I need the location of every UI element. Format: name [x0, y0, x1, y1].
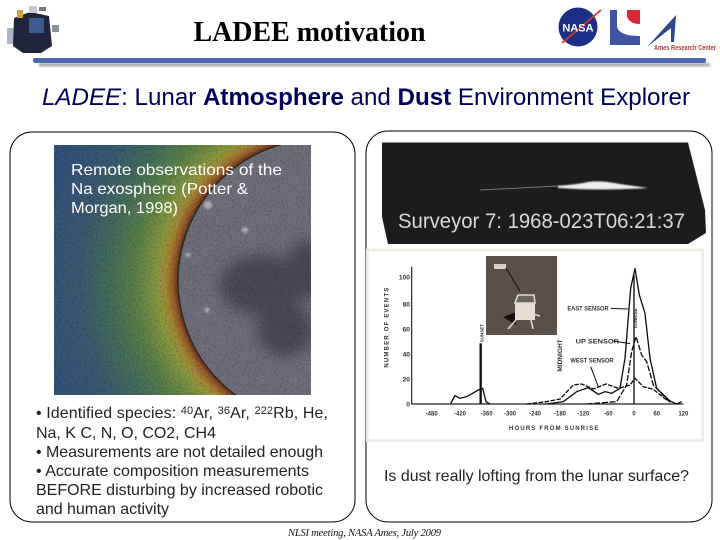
bullet text: Ar,: [193, 405, 218, 422]
sensor chart: 40: [403, 352, 410, 359]
footer: NLSI meeting, NASA Ames, July 2009: [287, 528, 442, 539]
bullet text: and human activity: [36, 501, 169, 518]
sensor chart: 100: [399, 275, 410, 282]
sensor chart: SUNSET: [479, 324, 484, 342]
sensor chart: 60: [403, 327, 410, 334]
sensor chart: HOURS FROM SUNRISE: [509, 426, 598, 432]
icon: NASA logo: [558, 8, 601, 46]
sensor chart: -420: [454, 411, 467, 417]
panel outline right: [366, 131, 712, 522]
sensor chart: NUMBER OF EVENTS: [384, 288, 390, 368]
panel: exosphere: [10, 132, 356, 522]
sensor chart: MIDNIGHT: [557, 339, 564, 372]
sensor chart: SUNRISE: [633, 308, 638, 328]
dust question: Is dust really lofting from the lunar surface?: [384, 468, 689, 485]
sensor chart: -180: [554, 411, 567, 417]
header rule: [33, 58, 710, 66]
bullet text: Rb, He,: [273, 405, 328, 422]
bullet text: • Measurements are not detailed enough: [36, 444, 323, 461]
sensor chart: 0: [406, 402, 410, 409]
sensor chart: EAST SENSOR: [567, 306, 609, 312]
panel outline left: [10, 132, 355, 522]
bullet text: BEFORE disturbing by increased robotic: [36, 482, 323, 499]
title: LADEE motivation: [194, 17, 426, 48]
bullet text: • Accurate composition measurements: [36, 463, 309, 480]
bullet text: [36, 405, 328, 518]
sensor chart: WEST SENSOR: [570, 359, 614, 365]
Surveyor 7 image: [382, 142, 706, 244]
Surveyor 7 image: Surveyor 7: 1968-023T06:21:37: [398, 210, 685, 233]
bullet text: 40: [181, 405, 193, 417]
icon: NASA logo: NASA: [562, 22, 594, 34]
sensor chart: UP SENSOR: [576, 339, 620, 345]
sensor chart: -300: [504, 411, 517, 417]
inset photo: lunar instrument: [486, 256, 557, 335]
icon: Ames Research Center logo: [647, 15, 716, 52]
sensor chart: -360: [481, 411, 493, 417]
image caption: Morgan, 1998): [71, 200, 178, 217]
sensor chart: 60: [653, 411, 661, 417]
sensor chart: -240: [529, 411, 542, 417]
image caption: Na exosphere (Potter &: [71, 181, 248, 198]
icon: LADEE spacecraft: [7, 6, 59, 53]
exosphere image: [54, 145, 311, 395]
sensor chart: -480: [426, 411, 438, 417]
bullet text: 222: [254, 405, 273, 417]
sensor chart: -60: [604, 411, 613, 417]
bullet text: Na, K C, N, O, CO2, CH4: [36, 425, 216, 442]
sensor chart: 120: [678, 411, 689, 417]
sensor chart: 20: [403, 377, 410, 384]
sensor chart: -120: [577, 411, 590, 417]
sensor chart: 0: [632, 411, 636, 417]
sensor chart: 80: [403, 302, 410, 309]
image caption: [71, 162, 282, 217]
panel: lunar dust: [366, 131, 712, 522]
image caption: Remote observations of the: [71, 162, 282, 179]
icon: JPL crescent logo: [610, 10, 640, 45]
bullet text: • Identified species:: [36, 405, 176, 422]
bullet text: Ar,: [230, 405, 254, 422]
bullet text: 36: [218, 405, 230, 417]
sensor chart: [367, 250, 703, 441]
subtitle: LADEE: Lunar Atmosphere and Dust Environment Explorer: [42, 84, 690, 111]
